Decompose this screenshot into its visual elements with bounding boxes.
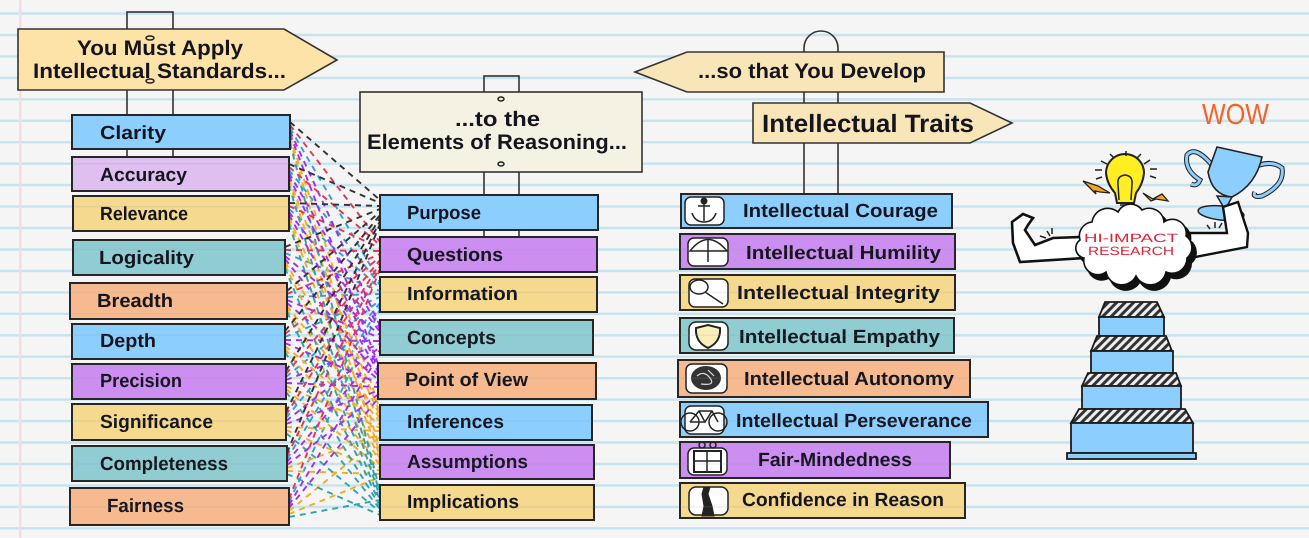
element: implications: [380, 485, 594, 520]
connection lines between standards and elements: [285, 122, 380, 517]
element: assumptions: Assumptions: [407, 452, 528, 473]
icon: figure: [689, 487, 728, 516]
trait: intellectual courage: Intellectual Courage: [743, 201, 938, 222]
trait: intellectual courage: [681, 194, 952, 228]
standard: depth: [72, 324, 285, 359]
trait: intellectual empathy: Intellectual Empathy: [739, 327, 940, 348]
icon: anchor: [685, 197, 724, 225]
signpost: elements of reasoning: ...to the: [455, 108, 540, 131]
trait: intellectual perseverance: Intellectual Perseverance: [736, 411, 972, 432]
standard: breadth: [70, 283, 287, 319]
icon: tiered stack: [1067, 302, 1196, 459]
standard: fairness: [70, 488, 289, 525]
standard: logicality: [73, 240, 285, 275]
trait: fair-mindedness: Fair-Mindedness: [758, 450, 912, 471]
icon: gift box: [688, 442, 727, 475]
icon: bicycle: [681, 406, 727, 434]
trait: intellectual humility: Intellectual Humility: [746, 243, 941, 264]
signpost: standards: Intellectual Standards...: [33, 60, 286, 83]
standard: breadth: Breadth: [97, 291, 173, 312]
standard: completeness: [72, 446, 287, 481]
trait: intellectual humility: [680, 234, 955, 269]
icon: cloud: RESEARCH: [1088, 244, 1174, 258]
standard: precision: [72, 364, 286, 399]
element: purpose: Purpose: [407, 203, 481, 224]
standard: relevance: [73, 196, 289, 231]
icon: trophy: [1187, 147, 1282, 222]
element: inferences: Inferences: [407, 412, 504, 433]
icon: cloud: [1076, 204, 1196, 290]
element: point of view: [378, 363, 596, 399]
icon: umbrella: [688, 238, 728, 266]
standard: significance: [72, 404, 286, 440]
standard: accuracy: [72, 157, 289, 191]
label: wow: WOW: [1202, 99, 1270, 131]
icon: cloud: HI-IMPACT: [1084, 231, 1179, 245]
signpost: traits: ...so that You Develop: [698, 60, 926, 83]
standard: precision: Precision: [100, 371, 182, 392]
element: questions: Questions: [407, 245, 503, 266]
trait: intellectual empathy: [680, 318, 954, 353]
signpost: traits: Intellectual Traits: [762, 110, 974, 138]
element: implications: Implications: [407, 492, 519, 513]
icon: flexing arms: [1012, 202, 1248, 262]
trait: intellectual integrity: Intellectual Integrity: [737, 283, 940, 304]
trait: intellectual autonomy: [678, 360, 970, 397]
standard: clarity: Clarity: [100, 123, 166, 144]
faint ruled lines showing through coloured boxes: [70, 164, 988, 507]
standard: relevance: Relevance: [100, 204, 188, 225]
element: inferences: [380, 405, 592, 440]
signpost: standards: [18, 12, 337, 157]
icon: hi-impact research mascot: [1012, 147, 1282, 290]
element: questions: [380, 237, 597, 272]
standard: completeness: Completeness: [100, 454, 228, 475]
panel: intellectual standards: [70, 115, 290, 525]
standard: significance: Significance: [100, 412, 213, 433]
trait: intellectual integrity: [680, 275, 955, 310]
trait: intellectual autonomy: Intellectual Autonomy: [744, 369, 954, 390]
standard: clarity: [72, 115, 290, 149]
element: concepts: Concepts: [407, 328, 496, 349]
standard: logicality: Logicality: [99, 248, 194, 269]
trait: intellectual perseverance: [680, 402, 988, 437]
standard: depth: Depth: [100, 331, 156, 352]
signpost: standards: You Must Apply: [77, 37, 243, 60]
element: point of view: Point of View: [405, 370, 528, 391]
icon: tangled scribble: [686, 364, 727, 393]
icon: key: [689, 279, 728, 307]
icon: light bulb: [1083, 151, 1168, 205]
trait: confidence in reason: Confidence in Reason: [742, 490, 944, 511]
signpost: elements of reasoning: [360, 76, 642, 237]
element: information: Information: [407, 284, 518, 305]
icon: shield: [689, 322, 728, 350]
element: information: [380, 277, 597, 312]
trait: fair-mindedness: [680, 442, 950, 478]
standard: fairness: Fairness: [107, 496, 184, 517]
standard: accuracy: Accuracy: [100, 165, 187, 186]
panel: elements of reasoning: [378, 195, 598, 520]
element: purpose: [380, 195, 598, 230]
element: assumptions: [380, 445, 594, 479]
panel: intellectual traits: [678, 194, 988, 518]
element: concepts: [380, 320, 593, 355]
signpost: elements of reasoning: Elements of Reasoning...: [367, 131, 627, 154]
signpost: traits: [635, 31, 1012, 194]
trait: confidence in reason: [680, 483, 965, 518]
